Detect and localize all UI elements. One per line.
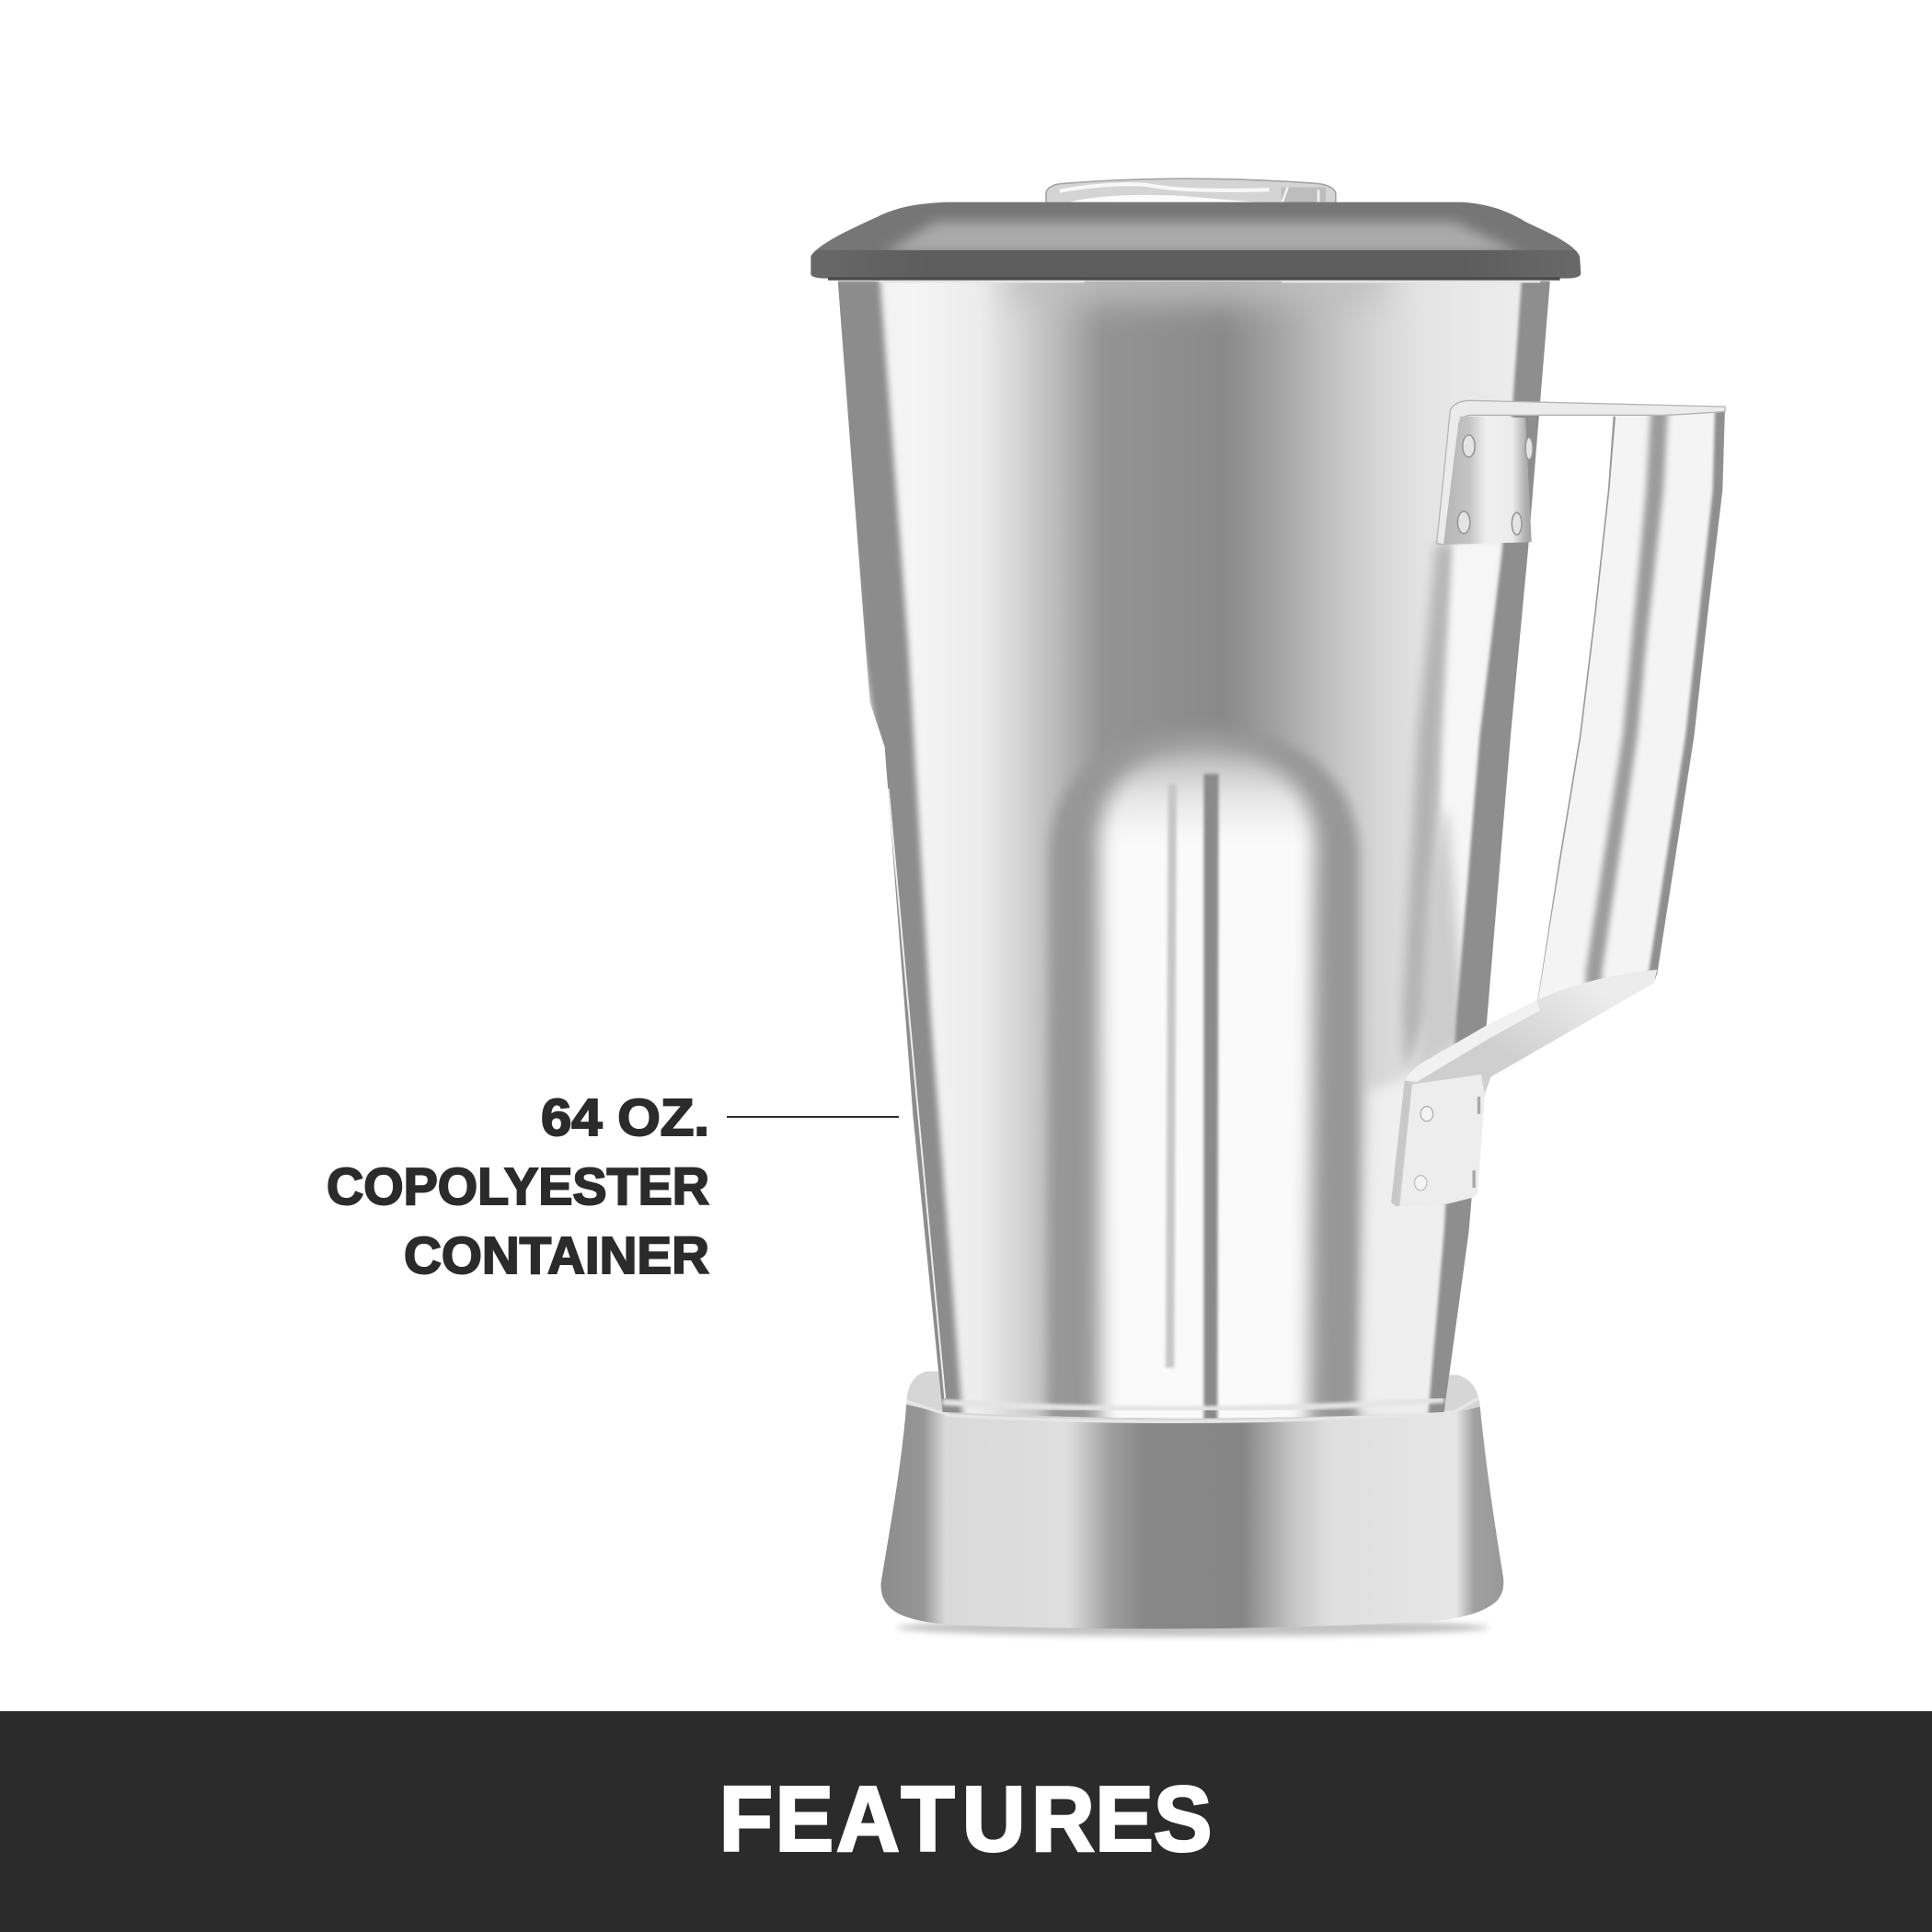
foot reflection: [943, 1399, 1444, 1409]
leader line: [727, 1116, 899, 1118]
top light falloff: [1010, 264, 1380, 301]
lid underside: [828, 277, 1560, 281]
right side strap stripe: [1402, 544, 1454, 1072]
right highlight: [1440, 545, 1498, 946]
callout label: CONTAINER: [404, 1226, 709, 1285]
top bar: [1437, 400, 1725, 545]
lid knob: [1046, 178, 1336, 206]
centre groove: [1203, 774, 1219, 1430]
callout label: COPOLYESTER: [327, 1157, 709, 1216]
footer heading: FEATURES: [719, 1767, 1212, 1870]
grip inner edge: [1536, 417, 1614, 1001]
right edge shade: [1427, 279, 1558, 1430]
grip outer edge: [1648, 404, 1728, 980]
left edge shade: [828, 279, 963, 1430]
lower plate: [1399, 1075, 1485, 1206]
bar top light strip: [1405, 1001, 1540, 1082]
left edge glint: [889, 788, 945, 1398]
grip: [1537, 412, 1725, 1000]
grip shadow stripe: [1586, 404, 1668, 992]
base rim: [906, 1372, 1479, 1420]
product photo: blender container: [801, 178, 1737, 1651]
dark brim: [801, 250, 1590, 281]
fine seam: [1166, 784, 1177, 1368]
inner arch highlight: [1099, 749, 1315, 1448]
handle: [1391, 395, 1737, 1206]
callout label: 64 OZ.: [541, 1088, 709, 1147]
dome highlight: [882, 222, 1523, 254]
rim glint: [880, 281, 1540, 282]
callout: 64 oz. copolyester container: [327, 1088, 899, 1285]
stainless steel jar body: [837, 281, 1550, 1419]
upper bracket: [1444, 417, 1533, 545]
lower bar and bracket: [1391, 970, 1657, 1206]
lid: [801, 197, 1590, 283]
inner arch halo: [1047, 727, 1359, 1442]
floor shadow: [897, 1619, 1489, 1637]
footer band: [0, 1711, 1932, 1932]
container base: [881, 1371, 1503, 1628]
callout label: [327, 1088, 709, 1285]
